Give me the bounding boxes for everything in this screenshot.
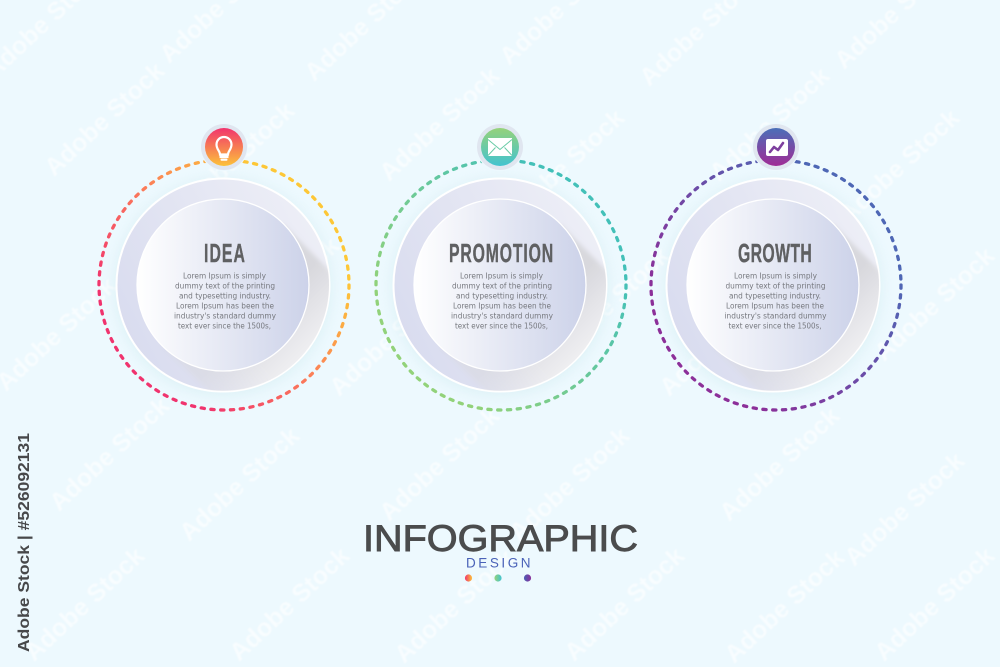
body text: promotion: dummy text of the printing [452, 282, 552, 290]
body text: growth [724, 272, 827, 330]
panel: idea [97, 124, 351, 412]
body text: promotion: industry's standard dummy [451, 312, 553, 320]
watermark pattern: Adobe Stock [719, 544, 850, 667]
body text: growth: Lorem Ipsum is simply [734, 272, 817, 280]
watermark pattern: Adobe Stock [374, 62, 505, 186]
icon: light bulb [200, 123, 248, 171]
body text: growth: industry's standard dummy [724, 312, 827, 320]
body text: idea: Lorem Ipsum is simply [183, 272, 266, 280]
icon: envelope [476, 123, 524, 171]
watermark pattern: Adobe Stock [559, 542, 690, 666]
watermark pattern: Adobe Stock [654, 277, 785, 401]
watermark pattern: Adobe Stock [504, 422, 635, 546]
watermark pattern: Adobe Stock [544, 242, 675, 366]
watermark pattern: Adobe Stock [224, 542, 355, 666]
watermark pattern: Adobe Stock [214, 232, 345, 356]
watermark pattern: Adobe Stock [174, 422, 305, 546]
heading: promotion: PROMOTION [449, 240, 553, 268]
body text: promotion: text ever since the 1500s, [455, 322, 548, 330]
dashed ring: idea [99, 160, 349, 410]
body text: idea: industry's standard dummy [174, 312, 276, 320]
body text: promotion: Lorem Ipsum has been the [453, 302, 551, 310]
body text: growth: text ever since the 1500s, [728, 322, 822, 330]
body text: growth: and typesetting industry. [729, 292, 821, 300]
watermark pattern: Adobe Stock [389, 544, 520, 667]
watermark pattern: Adobe Stock [169, 97, 300, 221]
watermark pattern: Adobe Stock [869, 542, 1000, 666]
watermark pattern: Adobe Stock [869, 242, 1000, 366]
body text: idea: Lorem Ipsum has been the [176, 302, 274, 310]
body text: idea: and typesetting industry. [179, 292, 271, 300]
dashed ring: promotion [376, 160, 626, 410]
watermark pattern: Adobe Stock [839, 447, 970, 571]
body text: idea [174, 272, 276, 330]
dashed ring: growth [651, 160, 901, 410]
body text: growth: Lorem Ipsum has been the [726, 302, 824, 310]
watermark pattern: Adobe Stock [834, 104, 965, 228]
stock id label: Adobe Stock | #526092131 [16, 433, 33, 652]
body text: promotion: and typesetting industry. [456, 292, 548, 300]
disc: idea [113, 177, 332, 396]
watermark pattern: Adobe Stock [374, 402, 505, 526]
panel: promotion [374, 124, 628, 412]
body text: growth: dummy text of the printing [726, 282, 826, 290]
watermark pattern: Adobe Stock [19, 542, 150, 666]
disc: growth [664, 178, 882, 396]
watermark pattern: Adobe Stock [39, 57, 170, 181]
subtitle: DESIGN [466, 556, 530, 570]
heading: idea: IDEA [204, 240, 245, 268]
watermark pattern: Adobe Stock [324, 277, 455, 401]
body text: idea: dummy text of the printing [175, 282, 275, 290]
watermark pattern: Adobe Stock [714, 402, 845, 526]
body text: idea: text ever since the 1500s, [178, 322, 271, 330]
disc: promotion [391, 178, 609, 396]
heading: growth: GROWTH [738, 240, 812, 268]
icon: growth chart [752, 123, 800, 171]
panel: growth [649, 124, 903, 412]
watermark pattern: Adobe Stock [499, 104, 630, 228]
body text: promotion [451, 272, 553, 330]
decorative dots [465, 574, 531, 582]
body text: promotion: Lorem Ipsum is simply [460, 272, 543, 280]
watermark pattern: Adobe Stock [44, 392, 175, 516]
watermark pattern: Adobe Stock [704, 62, 835, 186]
title: INFOGRAPHIC [363, 518, 638, 559]
